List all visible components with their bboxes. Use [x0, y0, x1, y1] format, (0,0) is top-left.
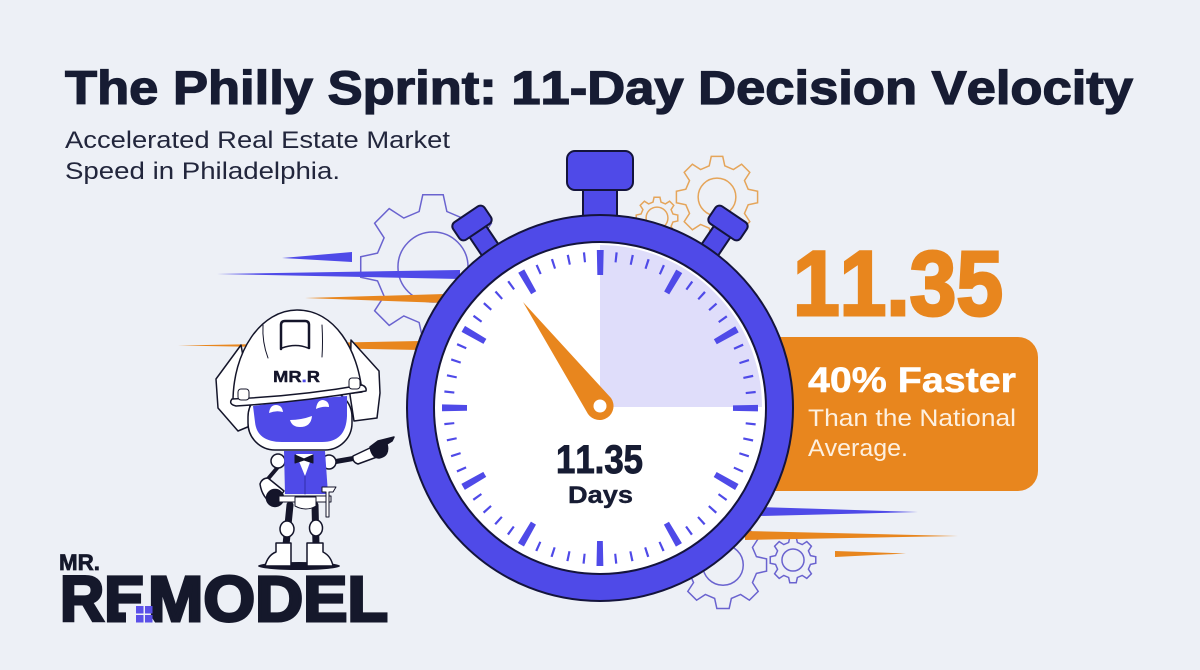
legs: [286, 505, 316, 545]
shadow: [258, 562, 340, 570]
callout card: [740, 337, 1038, 491]
eyes and smile: [269, 400, 329, 427]
logo line: RE: RE: [60, 563, 145, 635]
tool belt: [279, 487, 336, 517]
boots: [265, 543, 333, 566]
clock hand: [523, 302, 614, 420]
title: The Philly Sprint: 11-Day Decision Velocity: [65, 61, 1133, 114]
gear: large purple bottom: [679, 521, 767, 609]
gear: large orange: [676, 156, 758, 238]
hat label: MR.R: [273, 369, 321, 386]
minor tick marks: [448, 256, 752, 560]
subtitle: [65, 127, 450, 185]
logo window icon: [126, 605, 156, 624]
right arm pointing: [322, 437, 394, 469]
watch face: [434, 242, 766, 574]
logo line: MR.: MR.: [59, 550, 100, 575]
right button: [691, 204, 750, 265]
gear: small purple bottom: [770, 537, 816, 583]
gear: large purple left: [361, 195, 505, 339]
knees: [280, 520, 322, 537]
major tick marks: [454, 262, 746, 554]
callout heading: 40% Faster: [808, 361, 1016, 400]
subtitle: Speed in Philadelphia.: [65, 158, 340, 185]
elapsed quadrant: [600, 245, 762, 407]
big number: 11.35: [793, 233, 1003, 335]
crown: [567, 151, 633, 216]
stopwatch: [407, 151, 793, 601]
subtitle: Accelerated Real Estate Market: [65, 127, 450, 154]
logo line: MODEL: MODEL: [148, 563, 388, 635]
left button: [450, 204, 509, 265]
vest: [284, 451, 328, 494]
dial value: 11.35: [556, 438, 643, 482]
watch case: [407, 215, 793, 601]
callout body: [808, 405, 1016, 462]
callout body: Average.: [808, 435, 908, 462]
speed streaks: right: [745, 507, 958, 557]
speed streaks: left: [178, 252, 460, 350]
head: [248, 390, 352, 450]
callout body: Than the National: [808, 405, 1016, 432]
ear flaps: [216, 340, 380, 431]
face screen: [253, 396, 347, 442]
mascot: Mr. R robot: [216, 310, 394, 570]
gear: small orange: [636, 197, 678, 239]
left arm: [260, 454, 285, 506]
logo: Mr. Remodel: [59, 550, 388, 635]
dial unit: Days: [568, 482, 633, 509]
hard hat: [231, 310, 366, 406]
